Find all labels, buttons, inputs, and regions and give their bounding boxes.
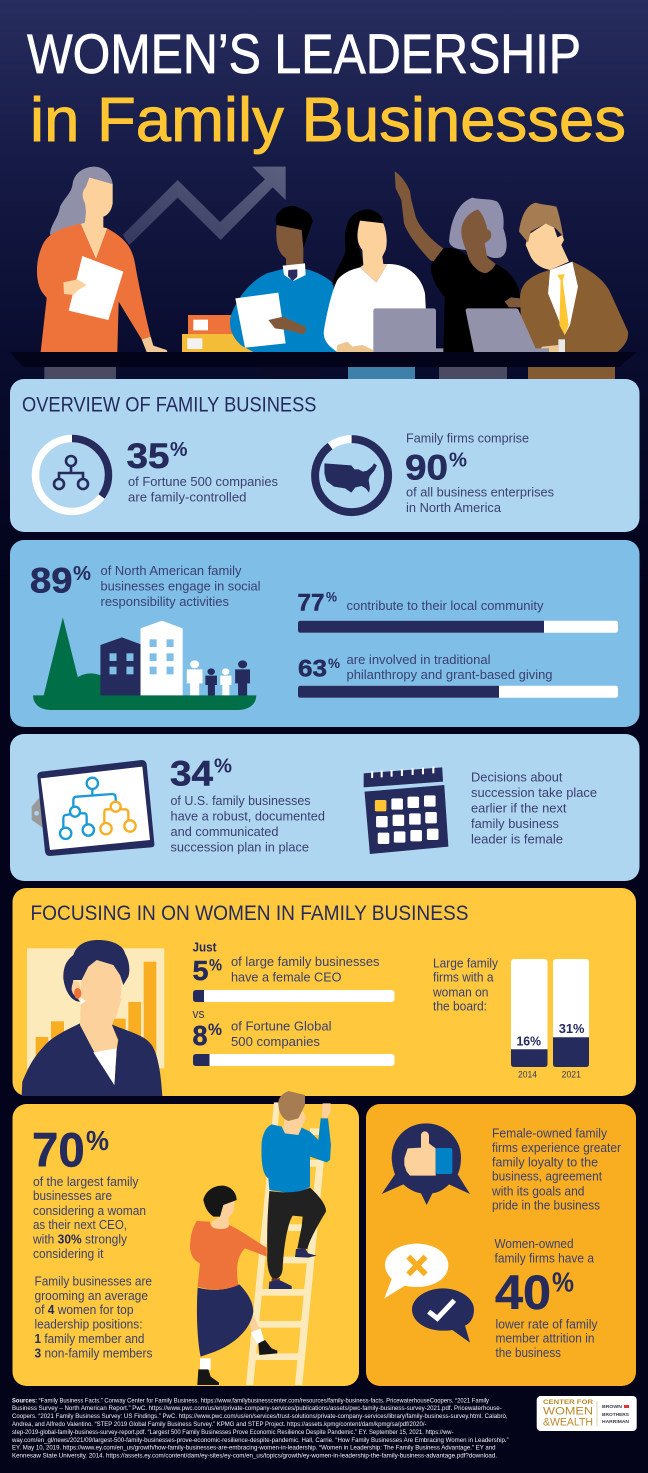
stat: 5 percent female CEOs: have a female CEO (231, 970, 342, 985)
sources: Andrea, and Alfredo Valentino. “STEP 2019 Global Family Business Survey.” KPMG and STEP Project. https://assets.kpmg/content/dam/kpmg/sa/pdf/2020/- (12, 1421, 426, 1428)
stat: 77 percent (298, 589, 544, 617)
person: man in brown suit (505, 203, 628, 352)
title (27, 22, 626, 155)
logo: Center for Women and Wealth, Brown Brothers Harriman: HARRIMAN (602, 1419, 630, 1424)
stat: 34 percent: % (214, 756, 232, 778)
stat: 8 percent Fortune Global 500: vs (192, 1006, 205, 1021)
stat: 70 percent: of the largest family (33, 1174, 139, 1189)
stat: 77 percent: % (326, 589, 337, 605)
panel: succession planning (10, 734, 640, 881)
illustration: community with buildings, tree and people (33, 617, 256, 710)
climber in blue sweater (261, 1091, 331, 1289)
text: decisions about succession: earlier if the next (471, 800, 567, 815)
text: family loyalty: firms experience greater (492, 1140, 622, 1155)
text: grooming women for leadership: grooming an average (34, 1288, 148, 1303)
stat: 63 percent: philanthropy and grant-based giving (346, 667, 552, 682)
icon: map of the United States (324, 463, 377, 493)
text: women on the board (432, 955, 498, 1014)
illustration: women climbing a ladder (190, 1091, 331, 1385)
person: woman in orange dress (37, 167, 167, 352)
logo: Center for Women and Wealth, Brown Brothers Harriman: WOMEN (543, 1405, 593, 1417)
icon: thumbs up speech bubble (382, 1123, 470, 1205)
text: grooming women for leadership: leadership positions: (34, 1317, 142, 1332)
stat: 40 percent: % (552, 1267, 574, 1298)
stat: 35 percent (126, 437, 278, 504)
stat: 89 percent: 89 (30, 562, 72, 601)
stat: 89 percent (30, 562, 261, 609)
stat: 40 percent: 40 (495, 1267, 551, 1320)
logo: Center for Women and Wealth, Brown Brothers Harriman: BROTHERS (602, 1412, 629, 1417)
stat: 40 percent: member attrition in (496, 1331, 594, 1346)
stat: 89 percent: % (73, 563, 91, 585)
climber in orange top (190, 1186, 277, 1385)
stat: 5 percent female CEOs: % (209, 956, 222, 975)
text: women on the board: Large family (433, 955, 498, 970)
sources: Sources: “Family Business Facts.” Conway Center for Family Business. https://www.familybusinesscenter.com/resources/family-business-facts. PricewaterhouseCoopers. “2021 Family (12, 1397, 490, 1404)
stat: 34 percent: of U.S. family businesses (170, 793, 311, 808)
stat: 40 percent: the business (496, 1345, 561, 1360)
title: in Family Businesses (30, 86, 626, 155)
stat: 35 percent: are family-controlled (128, 490, 246, 504)
bar: 5 percent (193, 990, 394, 1002)
stat: 34 percent: 34 (170, 755, 214, 794)
stat: 8 percent Fortune Global 500 (192, 1006, 332, 1051)
text: family loyalty: with its goals and (491, 1183, 584, 1198)
icon: calendar (364, 767, 448, 854)
stat: 40 percent: Women-owned (494, 1236, 574, 1251)
stat: 8 percent Fortune Global 500: % (208, 1020, 222, 1039)
stat: 90 percent: 90 (405, 448, 448, 487)
stat: 63 percent: 63 (298, 656, 327, 683)
text: grooming women for leadership: of 4 women for top (34, 1302, 134, 1317)
donut: 35 percent (36, 438, 108, 512)
text: women on the board: firms with a (433, 970, 494, 985)
stat: 70 percent: businesses are (33, 1188, 112, 1203)
bar: 77 percent (298, 621, 618, 633)
text: family loyalty (491, 1126, 622, 1213)
text: decisions about succession: Decisions about (471, 770, 563, 785)
panel: overview of family business (10, 379, 640, 532)
sources: Business Survey – North American Report.” PwC. https://www.pwc.com/us/en/private-company-services/publications/assets/pwc-family-business-survey-2021.pdf. Pricewaterhouse- (12, 1405, 502, 1412)
logo: Center for Women and Wealth, Brown Brothers Harriman: CENTER FOR (543, 1400, 594, 1406)
sources: Coopers. “2021 Family Business Survey: US Findings.” PwC. https://www.pwc.com/us/en/services/trust-solutions/private-company-services/library/family-business-survey.html. Calabrò, (12, 1413, 508, 1420)
books (182, 315, 253, 352)
stat: 70 percent: % (86, 1125, 109, 1156)
stat: 5 percent female CEOs: 5 (192, 955, 208, 986)
stat: 40 percent: family firms have a (494, 1251, 595, 1266)
stat: 5 percent female CEOs (192, 940, 380, 986)
laptop (466, 308, 549, 352)
stat: 8 percent Fortune Global 500: of Fortune Global (231, 1019, 332, 1034)
stat: 89 percent: responsibility activities (100, 594, 229, 609)
stat: 40 percent (494, 1236, 598, 1360)
column chart: 2014 versus 2021: 2021 (562, 1070, 581, 1080)
panel: loyalty and attrition (366, 1104, 636, 1386)
logo: Center for Women and Wealth, Brown Brothers Harriman (537, 1396, 637, 1431)
panel: focusing in on women in family business (12, 888, 636, 1096)
text: grooming women for leadership: 1 family member and (34, 1331, 144, 1346)
stat: 5 percent female CEOs: of large family businesses (231, 954, 380, 969)
icon: speech bubbles with cross and check (384, 1244, 474, 1343)
sources: Kennesaw State University. 2014. https://assets.ey.com/content/dam/ey-sites/ey-com/en_us/topics/growth/ey-women-in-leadership-the-family-business-advantage.pdf?download. (12, 1453, 497, 1460)
stat: 70 percent (32, 1125, 146, 1261)
stat: 35 percent: of Fortune 500 companies (128, 474, 278, 489)
stat: 90 percent: Family firms comprise (406, 430, 529, 446)
stat: 63 percent: are involved in traditional (346, 652, 491, 667)
stat: 89 percent: of North American family (100, 563, 242, 578)
laptop (373, 308, 448, 352)
panel: social responsibility (10, 540, 640, 727)
column chart: 2014 versus 2021: 2014 (518, 1070, 537, 1080)
sources (11, 1397, 509, 1460)
stat: 90 percent: in North America (406, 500, 502, 515)
text: decisions about succession: family business (471, 816, 559, 831)
person: woman in black with raised hand (395, 172, 521, 352)
stat: 34 percent: have a robust, documented (170, 809, 325, 824)
illustration: leadership team at a table (10, 167, 637, 381)
text: women on the board: woman on (432, 985, 488, 1000)
sources: EY. May 10, 2019. https://www.ey.com/en_us/growth/how-family-businesses-are-embracing-women-in-leadership. “Women in Leadership: The Family Business Advantage.” EY and (12, 1445, 496, 1452)
stat: 89 percent: businesses engage in social (100, 579, 261, 594)
column chart: 2014 versus 2021 (511, 959, 589, 1080)
illustration: businesswoman with bar chart (22, 940, 164, 1096)
stat: 40 percent: lower rate of family (496, 1316, 598, 1331)
text: family loyalty: business, agreement (492, 1169, 602, 1184)
person: woman in white blouse (324, 209, 428, 352)
icon: clipboard with succession chart (32, 760, 154, 856)
stat: 5 percent female CEOs: Just (192, 940, 217, 955)
stat: 77 percent: 77 (298, 590, 324, 617)
text: grooming women for leadership (34, 1273, 153, 1360)
logo: Center for Women and Wealth, Brown Brothers Harriman: &WEALTH (543, 1416, 593, 1428)
text: women on the board: the board: (433, 999, 487, 1014)
stat: 70 percent: considering it (33, 1246, 104, 1261)
icon: organisation chart (54, 456, 88, 489)
arrow: rising trend (123, 167, 286, 245)
stat: 8 percent Fortune Global 500: 8 (192, 1020, 208, 1051)
stat: 77 percent: contribute to their local community (346, 598, 544, 613)
stat: 8 percent Fortune Global 500: 500 companies (231, 1034, 321, 1049)
sources: way.com/en_gl/news/2021/09/largest-500-family-businesses-prove-economic-resilience-despite-pandemic. Hall, Carrie. “How Family Businesses Are Embracing Women in Leadership.” (11, 1437, 509, 1444)
stat: 63 percent: % (328, 655, 341, 671)
person: man in blue sweater (230, 206, 337, 352)
bar: 8 percent (193, 1054, 394, 1066)
stat: 34 percent (170, 755, 325, 854)
stat: 35 percent: % (170, 439, 188, 461)
text: family loyalty: pride in the business (492, 1198, 600, 1213)
stat: 34 percent: succession plan in place (170, 839, 309, 854)
column chart: 2014 versus 2021: 16% (516, 1034, 541, 1049)
column chart: 2014 versus 2021: 31% (559, 1021, 585, 1036)
sources: step-2019-global-family-business-survey-report.pdf. “Largest 500 Family Businesses Prove Economic Resilience Despite Pandemic.” EY. September 15, 2021. https://ww- (12, 1429, 454, 1436)
text: grooming women for leadership: Family businesses are (34, 1273, 152, 1288)
text: decisions about succession: succession take place (471, 785, 597, 800)
stat: 90 percent: of all business enterprises (406, 485, 554, 500)
donut: 90 percent (315, 439, 388, 512)
logo: Center for Women and Wealth, Brown Brothers Harriman: BROWN (602, 1404, 623, 1409)
text: family loyalty: family loyalty to the (492, 1154, 598, 1169)
table top (10, 352, 637, 367)
stat: 63 percent (298, 652, 552, 683)
stat: 70 percent: with 30% strongly (32, 1232, 127, 1247)
stat: 70 percent: considering a woman (33, 1203, 146, 1218)
text: decisions about succession: leader is female (471, 831, 563, 846)
stat: 90 percent: % (449, 450, 467, 472)
stat: 70 percent: as their next CEO, (33, 1217, 127, 1232)
ladder (246, 1102, 324, 1385)
text: family loyalty: Female-owned family (492, 1126, 607, 1141)
bar: 63 percent (298, 686, 618, 698)
heading: overview: OVERVIEW OF FAMILY BUSINESS (22, 394, 316, 416)
stat: 34 percent: and communicated (170, 824, 278, 839)
stat: 90 percent (405, 430, 554, 515)
heading: focusing in: FOCUSING IN ON WOMEN IN FAMILY BUSINESS (30, 902, 468, 925)
stat: 35 percent: 35 (126, 437, 170, 476)
text: grooming women for leadership: 3 non-family members (34, 1345, 153, 1360)
panel: considering a woman as next CEO (12, 1091, 359, 1386)
table legs (44, 365, 615, 381)
text: decisions about succession (471, 770, 597, 846)
stat: 70 percent: 70 (32, 1125, 85, 1178)
